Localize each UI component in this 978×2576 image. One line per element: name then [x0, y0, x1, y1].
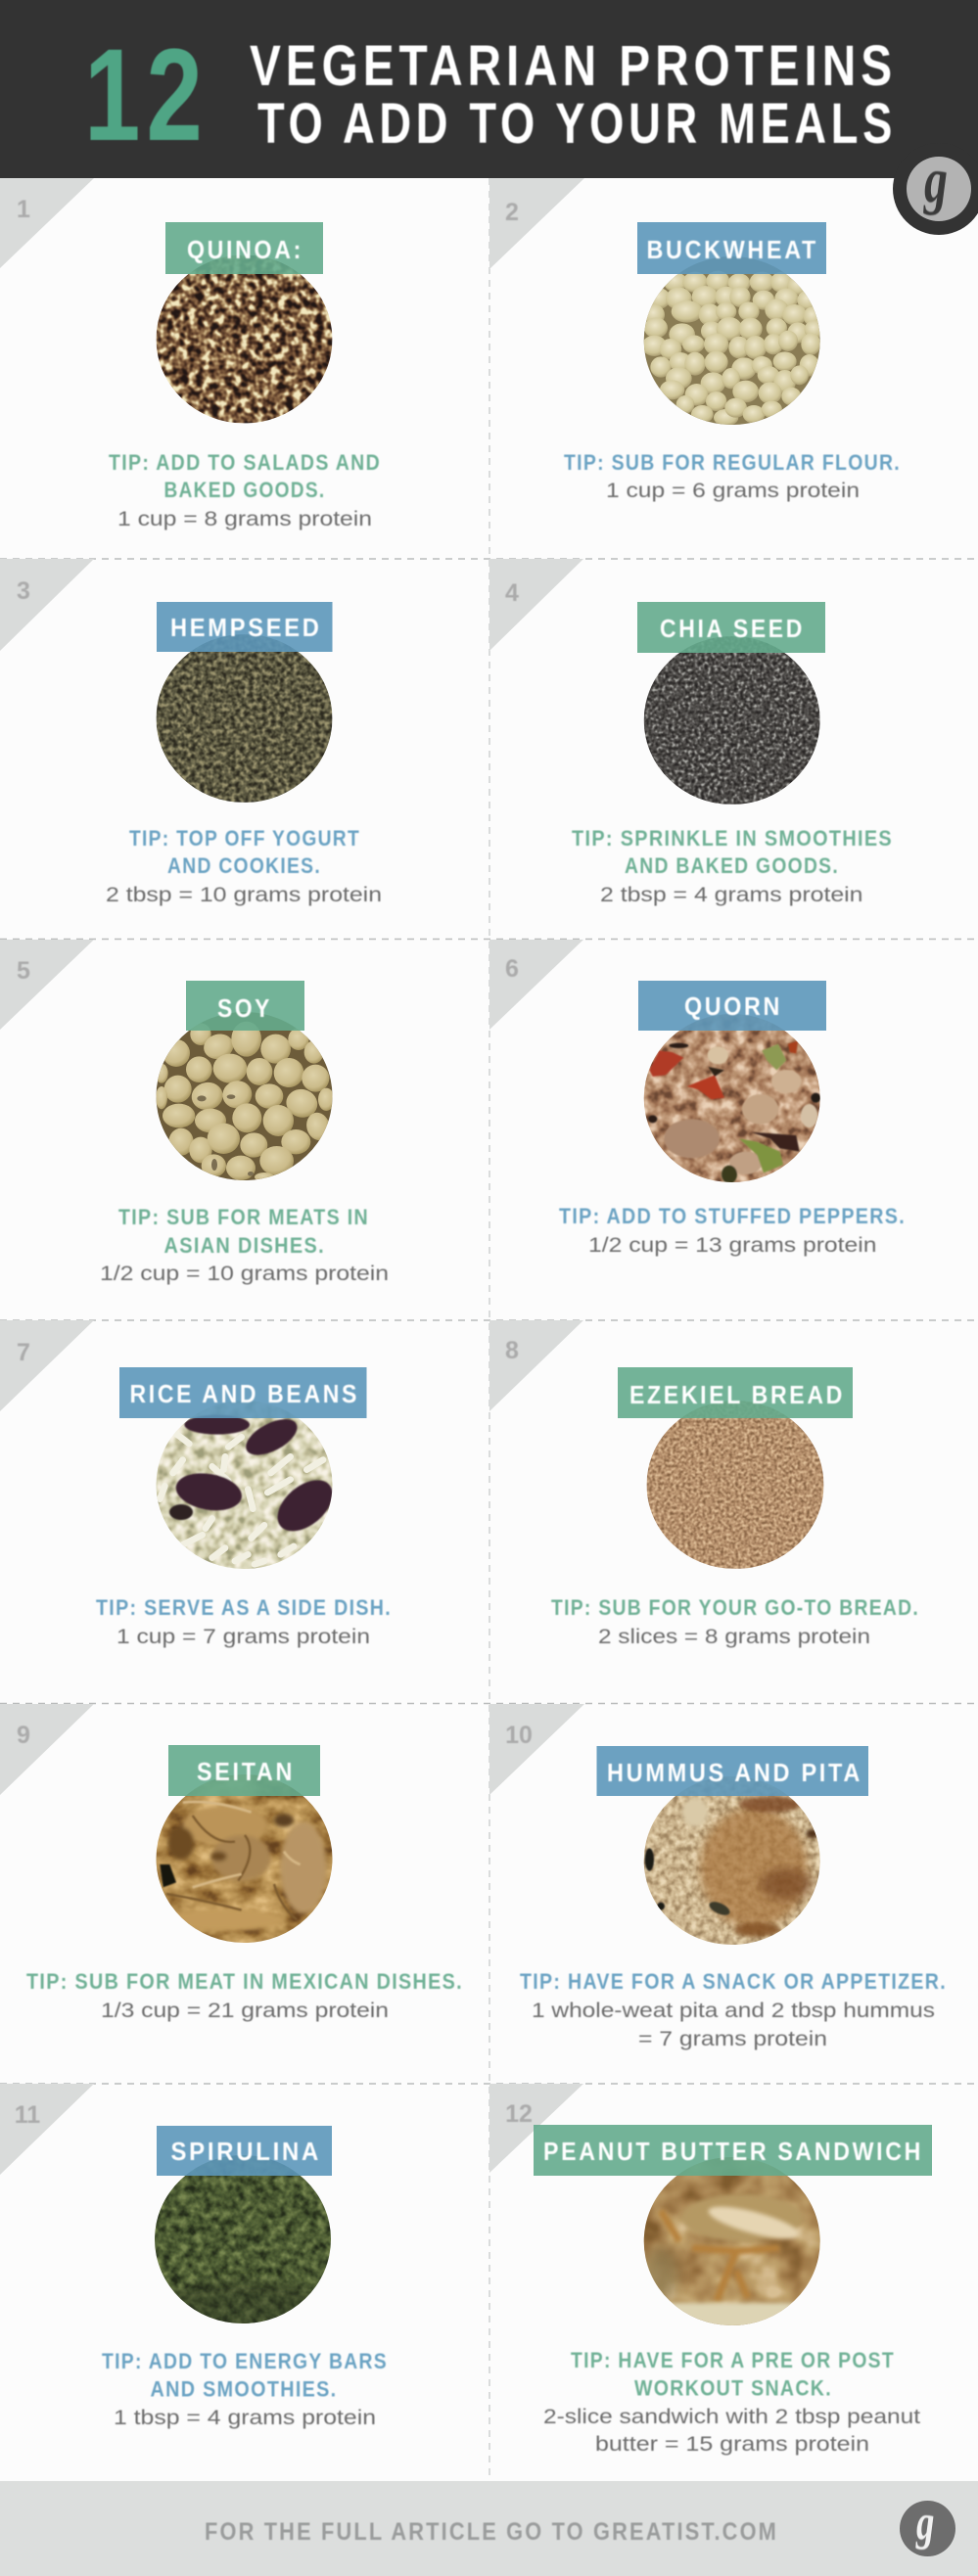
label: hempseed: HEMPSEED: [170, 613, 321, 642]
tip and amount: TIP: SERVE AS A SIDE DISH.: [96, 1595, 392, 1620]
label: peanut butter sandwich: [534, 2125, 932, 2176]
label: ezekiel bread: [618, 1367, 853, 1418]
tip and amount: 1/2 cup = 13 grams protein: [588, 1234, 877, 1257]
label: peanut butter sandwich: PEANUT BUTTER SANDWICH: [543, 2137, 923, 2166]
label: quinoa: QUINOA:: [187, 235, 303, 264]
number 11: 11: [15, 2101, 40, 2129]
tip and amount: BAKED GOODS.: [164, 478, 325, 502]
photo: buckwheat: [641, 254, 824, 427]
number 10: 10: [505, 1722, 533, 1749]
tip and amount: 2 tbsp = 10 grams protein: [106, 884, 382, 906]
tip and amount: [96, 1595, 392, 1648]
panel 4: chia seed: [489, 559, 893, 906]
label: soy: SOY: [217, 993, 272, 1023]
tip and amount: [520, 1969, 947, 2050]
tip and amount: AND SMOOTHIES.: [151, 2376, 337, 2402]
tip and amount: 1/2 cup = 10 grams protein: [100, 1263, 389, 1285]
photo: spirulina: [155, 2155, 331, 2323]
photo: rice and beans: [157, 1402, 333, 1569]
tip and amount: TIP: ADD TO STUFFED PEPPERS.: [559, 1204, 906, 1228]
tip and amount: 2 tbsp = 4 grams protein: [600, 884, 863, 906]
label: quorn: QUORN: [684, 991, 782, 1021]
tip and amount: 2-slice sandwich with 2 tbsp peanut: [543, 2406, 920, 2428]
tip and amount: [572, 826, 893, 906]
label: chia seed: [637, 602, 825, 653]
tip and amount: [551, 1595, 919, 1648]
panel 11: spirulina: [0, 2084, 388, 2429]
icon: Greatist logo badge: g: [922, 146, 948, 216]
tip and amount: [559, 1204, 906, 1257]
tip and amount: [102, 2349, 388, 2429]
tip and amount: ASIAN DISHES.: [164, 1233, 325, 1258]
label: hummus and pita: [597, 1746, 868, 1796]
tip and amount: [543, 2348, 920, 2456]
panel 9: seitan: [0, 1704, 463, 2022]
photo: quinoa: [157, 254, 333, 423]
label: hummus and pita: HUMMUS AND PITA: [607, 1758, 862, 1787]
tip and amount: [564, 450, 901, 502]
header banner: [0, 0, 978, 178]
icon: footer logo: [900, 2495, 955, 2556]
tip and amount: 1 cup = 8 grams protein: [117, 508, 372, 530]
label: chia seed: CHIA SEED: [660, 614, 805, 643]
tip and amount: butter = 15 grams protein: [595, 2433, 869, 2456]
panel 5: soy: [0, 940, 389, 1285]
number 2: 2: [505, 199, 519, 226]
photo: seitan: [152, 1771, 338, 1948]
icon: Greatist logo badge: [893, 143, 978, 235]
number 7: 7: [17, 1339, 30, 1366]
label: rice and beans: RICE AND BEANS: [129, 1379, 359, 1408]
tip and amount: 1 tbsp = 4 grams protein: [114, 2407, 376, 2429]
panel 10: hummus and pita: [489, 1704, 947, 2050]
tip and amount: [109, 450, 381, 530]
tip and amount: TIP: TOP OFF YOGURT: [129, 826, 360, 851]
tip and amount: TIP: HAVE FOR A PRE OR POST: [571, 2348, 895, 2372]
photo: peanut butter sandwich: [641, 2153, 823, 2332]
tip and amount: TIP: SUB FOR MEAT IN MEXICAN DISHES.: [26, 1969, 463, 1994]
title number 12: 12: [84, 23, 209, 168]
panel 7: rice and beans: [0, 1320, 392, 1648]
tip and amount: = 7 grams protein: [638, 2028, 827, 2050]
number 6: 6: [505, 955, 519, 983]
photo: soy: [152, 1008, 338, 1184]
number 5: 5: [17, 957, 30, 985]
tip and amount: 2 slices = 8 grams protein: [598, 1626, 870, 1648]
photo: quorn: [641, 1008, 823, 1184]
tip and amount: TIP: ADD TO ENERGY BARS: [102, 2349, 388, 2373]
panel 2: buckwheat: [489, 178, 901, 502]
tip and amount: WORKOUT SNACK.: [634, 2376, 832, 2400]
label: quinoa: [165, 222, 323, 274]
panel 3: hempseed: [0, 559, 382, 906]
label: spirulina: SPIRULINA: [170, 2137, 321, 2166]
number 12: 12: [505, 2100, 533, 2128]
tip and amount: TIP: SUB FOR REGULAR FLOUR.: [564, 450, 901, 475]
panel 8: ezekiel bread: [489, 1320, 919, 1648]
photo: chia seed: [644, 636, 820, 805]
number 8: 8: [505, 1337, 519, 1364]
label: rice and beans: [119, 1367, 366, 1418]
number 3: 3: [17, 577, 30, 605]
footer text: FOR THE FULL ARTICLE GO TO GREATIST.COM: [205, 2518, 778, 2546]
tip and amount: TIP: ADD TO SALADS AND: [109, 450, 381, 475]
title text: [250, 34, 897, 156]
label: ezekiel bread: EZEKIEL BREAD: [629, 1380, 845, 1409]
panel 6: quorn: [489, 940, 906, 1257]
label: seitan: SEITAN: [197, 1757, 295, 1786]
tip and amount: [100, 1205, 389, 1285]
number 4: 4: [505, 579, 519, 607]
photo: hummus and pita: [641, 1771, 823, 1948]
tip and amount: 1 cup = 7 grams protein: [116, 1626, 370, 1648]
label: spirulina: [157, 2126, 332, 2176]
tip and amount: AND COOKIES.: [167, 853, 321, 878]
tip and amount: 1 whole-weat pita and 2 tbsp hummus: [532, 2000, 935, 2022]
panel 12: peanut butter sandwich: [489, 2084, 932, 2456]
tip and amount: TIP: SUB FOR MEATS IN: [118, 1205, 369, 1229]
icon: footer logo: g: [915, 2495, 934, 2550]
photo: ezekiel bread: [646, 1401, 824, 1569]
tip and amount: 1 cup = 6 grams protein: [606, 480, 860, 502]
label: hempseed: [157, 602, 333, 652]
label: soy: [186, 981, 304, 1031]
tip and amount: AND BAKED GOODS.: [625, 853, 839, 878]
label: seitan: [168, 1745, 320, 1796]
tip and amount: TIP: SUB FOR YOUR GO-TO BREAD.: [551, 1595, 919, 1620]
tip and amount: 1/3 cup = 21 grams protein: [101, 2000, 389, 2022]
tip and amount: [106, 826, 382, 906]
tip and amount: TIP: SPRINKLE IN SMOOTHIES: [572, 826, 893, 851]
number 9: 9: [17, 1722, 30, 1749]
tip and amount: [26, 1969, 463, 2022]
panel 1: quinoa: [0, 178, 381, 530]
footer bar: [0, 2481, 978, 2576]
label: buckwheat: [637, 222, 826, 274]
photo: hempseed: [157, 634, 333, 803]
label: quorn: [638, 981, 826, 1031]
number 1: 1: [17, 196, 30, 223]
label: buckwheat: BUCKWHEAT: [646, 235, 818, 264]
